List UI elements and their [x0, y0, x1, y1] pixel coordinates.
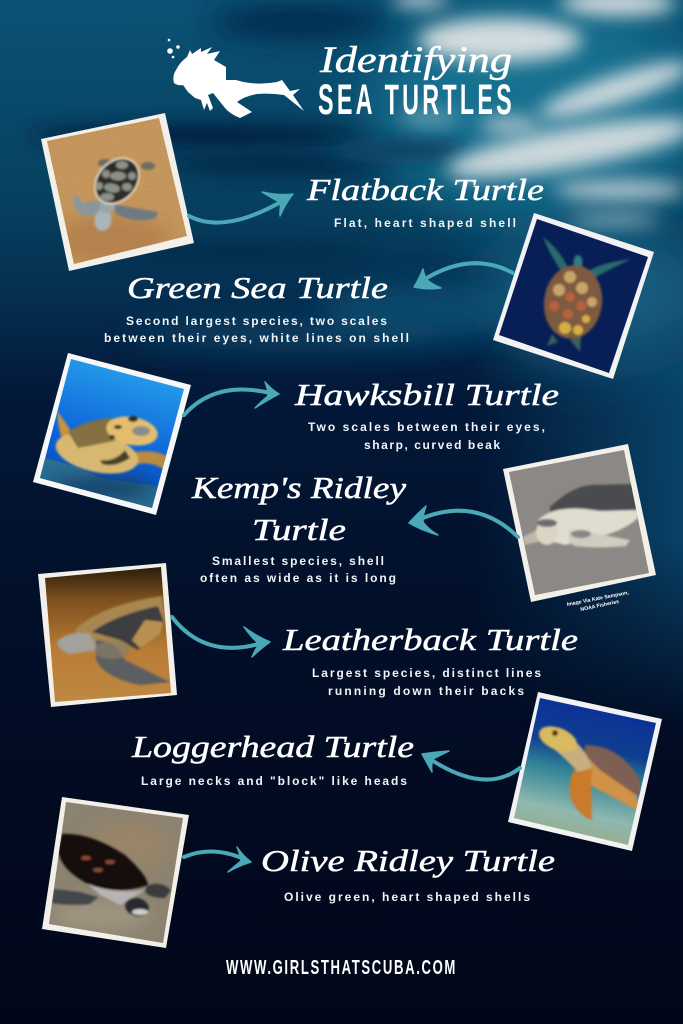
arrow: loggerhead — [422, 751, 520, 780]
background: blurred ocean surface — [0, 0, 683, 724]
heading: flatback turtle: Flatback Turtle — [306, 172, 544, 207]
text: hawksbill description: Two scales between their eyes, — [308, 420, 545, 434]
photo: kemp's ridley turtle — [503, 444, 656, 602]
arrow: kemp's ridley — [409, 506, 518, 537]
text: loggerhead description: Large necks and "block" like heads — [141, 774, 407, 788]
arrow: flatback — [189, 192, 293, 223]
icon: scuba diver — [173, 47, 304, 118]
heading: kemp's ridley turtle — [191, 470, 406, 547]
text: hawksbill description: sharp, curved beak — [364, 438, 500, 452]
arrow: hawksbill — [184, 382, 279, 415]
text: kemp's ridley description: often as wide as it is long — [200, 571, 396, 585]
photo: flatback turtle — [41, 113, 194, 271]
photo: loggerhead turtle — [508, 692, 662, 851]
heading: olive ridley turtle: Olive Ridley Turtle — [261, 843, 555, 878]
text: leatherback description: Largest species, distinct lines — [312, 666, 541, 680]
heading: loggerhead turtle: Loggerhead Turtle — [131, 729, 414, 764]
text: kemp's ridley description: Smallest species, shell — [212, 554, 384, 568]
caption: image credit: Image Via Kate Sampson, — [566, 590, 630, 608]
text: green sea turtle description — [104, 314, 409, 345]
text: hawksbill description — [308, 420, 545, 452]
title — [318, 40, 515, 124]
heading: hawksbill turtle: Hawksbill Turtle — [294, 377, 559, 412]
text: flatback description: Flat, heart shaped shell — [334, 216, 516, 230]
text: leatherback description — [312, 666, 541, 698]
heading: green sea turtle: Green Sea Turtle — [127, 270, 388, 305]
title: SEA TURTLES — [318, 76, 515, 124]
heading: leatherback turtle: Leatherback Turtle — [282, 622, 578, 657]
text: green sea turtle description: Second largest species, two scales — [126, 314, 387, 328]
heading: kemp's ridley turtle: Kemp's Ridley — [191, 470, 406, 505]
text: kemp's ridley description — [200, 554, 396, 585]
website url: WWW.GIRLSTHATSCUBA.COM — [226, 957, 457, 979]
arrow: green sea turtle — [414, 263, 513, 289]
photo: olive ridley turtle — [40, 795, 195, 950]
text: olive ridley description: Olive green, heart shaped shells — [284, 890, 530, 904]
photo: green sea turtle — [493, 213, 654, 379]
text: green sea turtle description: between their eyes, white lines on shell — [104, 331, 409, 345]
photo: hawksbill turtle — [33, 353, 191, 515]
caption: image credit: NOAA Fisheries — [580, 599, 620, 613]
text: leatherback description: running down their backs — [328, 684, 524, 698]
arrow: leatherback — [172, 617, 270, 657]
arrow: olive ridley — [184, 847, 251, 872]
photo: leatherback turtle — [38, 563, 177, 707]
title: Identifying — [319, 40, 512, 81]
heading: kemp's ridley turtle: Turtle — [252, 512, 346, 547]
bubbles — [167, 39, 180, 58]
